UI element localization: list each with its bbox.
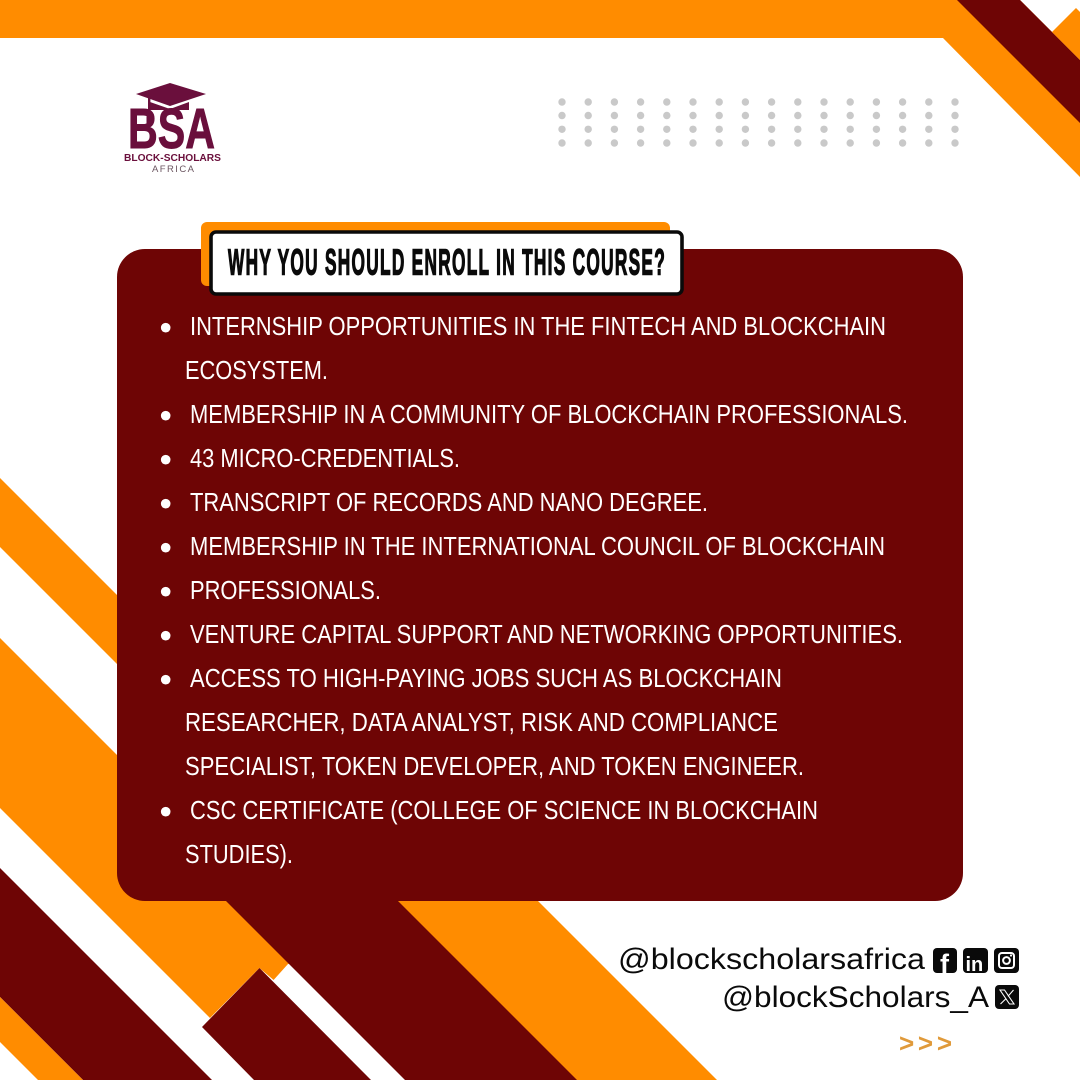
- heading: orange backing tab: [201, 222, 670, 286]
- icon: linkedin: [963, 948, 988, 976]
- bottom-left decorative bands: [0, 478, 717, 1080]
- bullet: high-paying jobs: [161, 665, 804, 781]
- bullet: high-paying jobs: SPECIALIST, TOKEN DEVELOPER, AND TOKEN ENGINEER.: [185, 753, 804, 781]
- bullet: community membership: MEMBERSHIP IN A COMMUNITY OF BLOCKCHAIN PROFESSIONALS.: [190, 401, 908, 429]
- icon: facebook: f: [940, 949, 950, 979]
- benefits list: [161, 313, 908, 869]
- dot grid: [558, 98, 959, 147]
- arrows: next page: >>>: [899, 1028, 952, 1058]
- bullet: high-paying jobs: ACCESS TO HIGH-PAYING JOBS SUCH AS BLOCKCHAIN: [190, 665, 782, 693]
- logo letters: BSA: [128, 97, 215, 161]
- bullet: venture capital: VENTURE CAPITAL SUPPORT AND NETWORKING OPPORTUNITIES.: [190, 621, 903, 649]
- bullet: internships: [161, 313, 886, 385]
- social handles: [618, 943, 1019, 1014]
- logo: Block-Scholars Africa: [124, 83, 221, 175]
- handle: blockScholars_A: @blockScholars_A: [722, 981, 989, 1014]
- bullet: internships: INTERNSHIP OPPORTUNITIES IN THE FINTECH AND BLOCKCHAIN: [190, 313, 886, 341]
- icon: instagram: [994, 948, 1019, 973]
- panel: course benefits: [117, 249, 963, 901]
- bullet: CSC certificate: [161, 797, 818, 869]
- bullet: international council: MEMBERSHIP IN THE INTERNATIONAL COUNCIL OF BLOCKCHAIN: [190, 533, 885, 561]
- bullet: CSC certificate: STUDIES).: [185, 841, 293, 869]
- top-right decorative bands: [0, 0, 1080, 177]
- icon: graduation cap: [136, 83, 206, 126]
- logo name: BLOCK-SCHOLARS: [124, 152, 221, 164]
- logo subtitle: AFRICA: [152, 164, 195, 175]
- handle: blockscholarsafrica: @blockscholarsafrica: [618, 943, 925, 976]
- heading box: WHY YOU SHOULD ENROLL IN THIS COURSE?: [228, 241, 665, 282]
- bullet: high-paying jobs: RESEARCHER, DATA ANALYST, RISK AND COMPLIANCE: [185, 709, 778, 737]
- bullet: internships: ECOSYSTEM.: [185, 357, 328, 385]
- icon: linkedin: in: [966, 954, 983, 976]
- bullet: CSC certificate: CSC CERTIFICATE (COLLEGE OF SCIENCE IN BLOCKCHAIN: [190, 797, 818, 825]
- bullet: professionals: PROFESSIONALS.: [190, 577, 381, 605]
- bullet: micro-credentials: 43 MICRO-CREDENTIALS.: [190, 445, 460, 473]
- icon: facebook: [933, 948, 957, 979]
- heading box: [211, 232, 682, 294]
- icon: X: [995, 985, 1019, 1009]
- bullet: transcript: TRANSCRIPT OF RECORDS AND NANO DEGREE.: [190, 489, 708, 517]
